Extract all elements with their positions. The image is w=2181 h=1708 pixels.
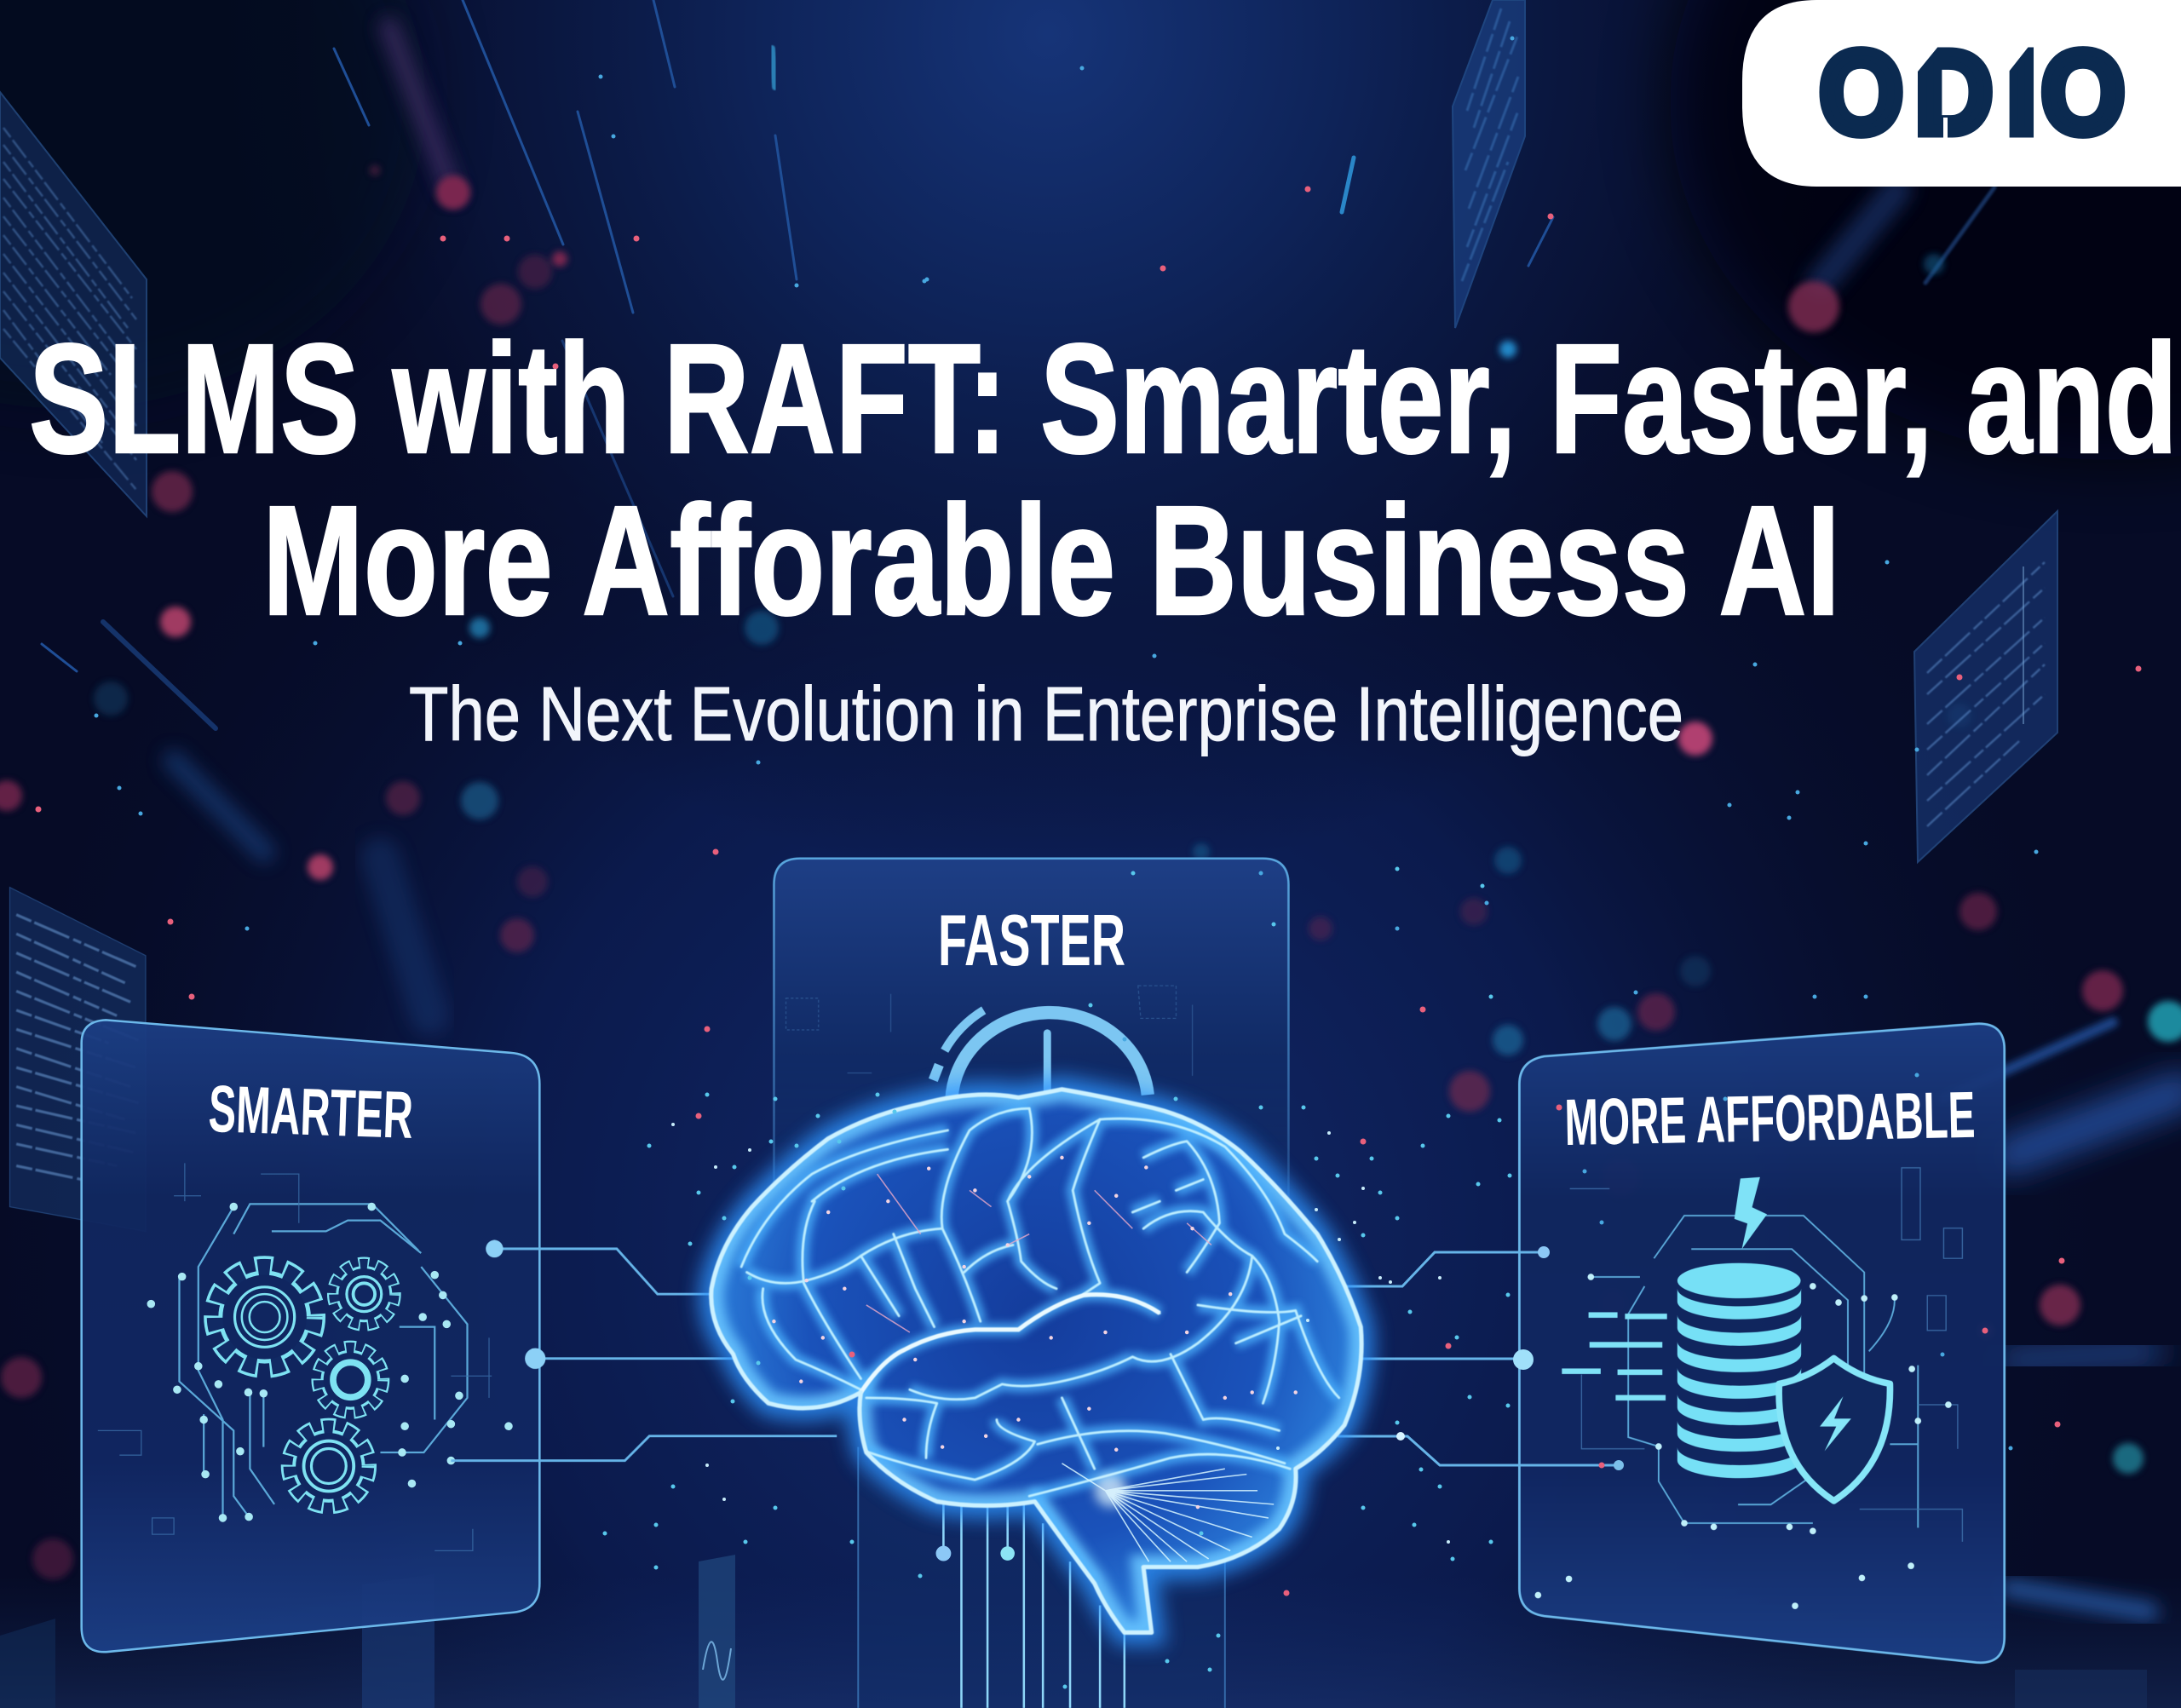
shield <box>1779 1358 1890 1501</box>
logo wordmark: ODIO <box>1819 27 2125 158</box>
title <box>29 311 2178 647</box>
floating window: lower left code screen <box>9 888 146 1231</box>
brain body <box>711 1090 1361 1632</box>
label: faster: FASTER <box>938 900 1125 981</box>
panel surface: faster <box>774 859 1288 1289</box>
floating window: right code screen <box>1914 511 2057 862</box>
brain inner layers <box>711 1090 1361 1632</box>
brain glow <box>711 1090 1361 1632</box>
panel surface: smarter <box>82 1020 539 1652</box>
connector lines left <box>451 1240 837 1461</box>
logo badge <box>1742 0 2181 187</box>
panel surface: more affordable <box>1519 1024 2005 1663</box>
brain cerebellum rays <box>1062 1464 1274 1561</box>
brain inner sparks <box>774 1158 1296 1507</box>
lightning bolt <box>1735 1177 1767 1249</box>
brain outline <box>711 1090 1361 1632</box>
panel: smarter <box>82 1020 539 1652</box>
panel: faster <box>774 859 1288 1708</box>
icon: glowing brain <box>711 1090 1361 1632</box>
traces below the brain <box>935 1480 1125 1708</box>
icon: database, lightning and shield <box>1538 1168 1962 1606</box>
floating window: small bottom slates <box>0 1555 2147 1708</box>
label: smarter: SMARTER <box>207 1071 414 1153</box>
panel: more affordable <box>1519 1024 2005 1663</box>
speed dashes <box>1562 1315 1667 1398</box>
database stack <box>1677 1263 1801 1478</box>
floating window: upper right code screen <box>1453 0 1525 328</box>
icon: speedometer <box>933 1010 1148 1099</box>
icon: gears with circuit traces <box>98 1163 509 1550</box>
subtitle: The Next Evolution in Enterprise Intelligence <box>409 672 1683 757</box>
connector lines right <box>1338 1246 1624 1470</box>
floating window: upper left code screen <box>0 92 147 516</box>
